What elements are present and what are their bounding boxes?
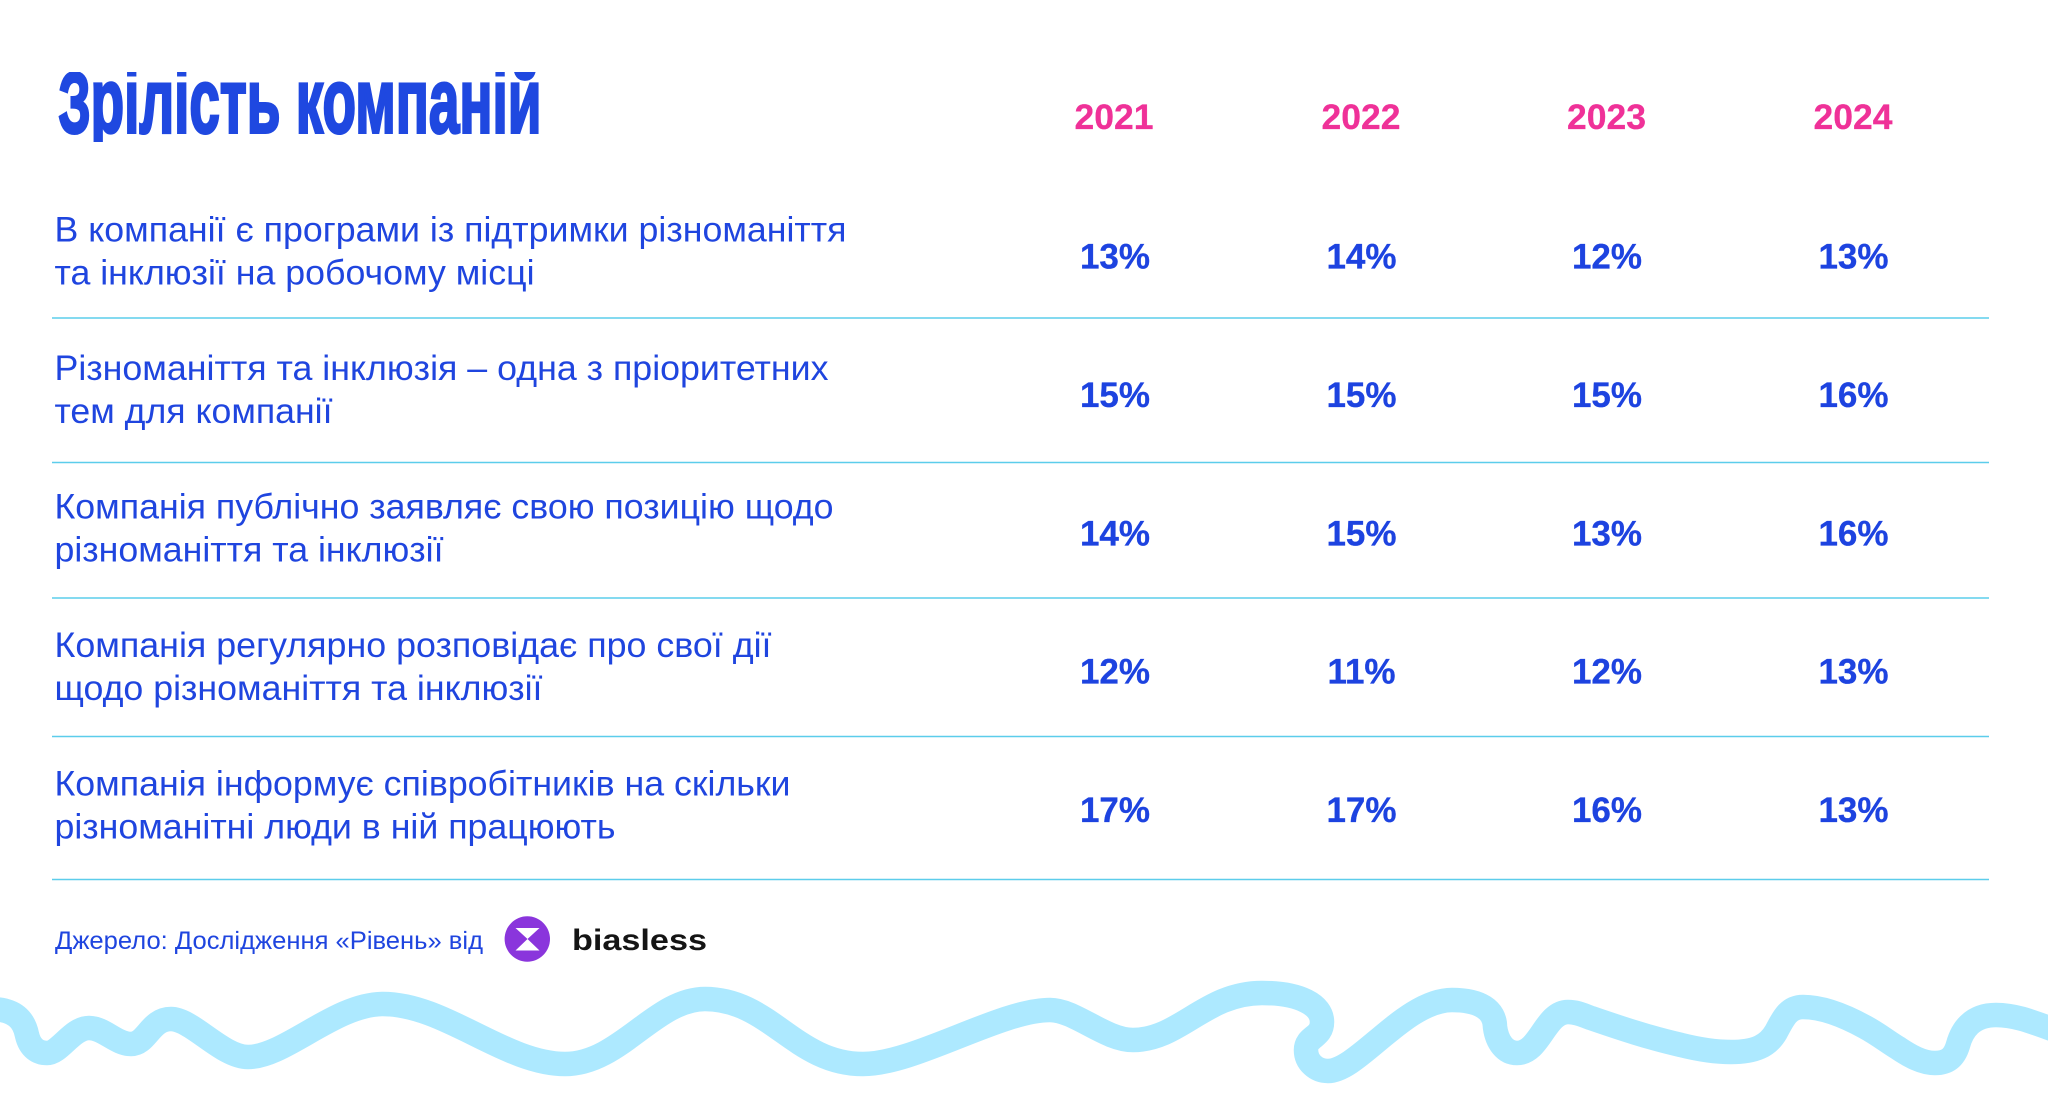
- row 1: 13%: [1080, 238, 1150, 276]
- row 5: Компанія інформує співробітників на скільки: [54, 764, 790, 803]
- row 1: 13%: [1818, 238, 1889, 276]
- row 1: та інклюзії на робочому місці: [54, 254, 534, 293]
- row 4: 12%: [1572, 653, 1642, 692]
- year headers: 2021: [1075, 97, 1153, 137]
- biasless wordmark: biasless: [572, 924, 707, 957]
- row 2: 15%: [1326, 376, 1397, 415]
- row 4: 11%: [1327, 653, 1396, 692]
- table: company maturity: [52, 211, 1989, 879]
- row 4: 13%: [1818, 653, 1889, 692]
- row 3: різноманіття та інклюзії: [54, 530, 444, 570]
- icon: biasless logo mark: [505, 916, 550, 962]
- year headers: 2024: [1814, 97, 1893, 137]
- row 2: тем для компанії: [54, 392, 333, 431]
- row 5: 17%: [1080, 791, 1150, 830]
- row 4: 12%: [1080, 653, 1150, 692]
- row 3: 16%: [1818, 514, 1889, 553]
- row 2: 15%: [1080, 376, 1150, 415]
- row 2: [54, 349, 1889, 431]
- row 5: 16%: [1572, 791, 1642, 830]
- row 3: Компанія публічно заявляє свою позицію щодо: [54, 488, 833, 526]
- row 3: 15%: [1326, 514, 1397, 553]
- row 2: Різноманіття та інклюзія – одна з пріоритетних: [54, 349, 829, 388]
- year headers: [1075, 97, 1893, 137]
- row 1: 14%: [1326, 238, 1397, 276]
- row 4: щодо різноманіття та інклюзії: [54, 669, 543, 708]
- row 5: 13%: [1818, 791, 1889, 830]
- row 2: 15%: [1572, 376, 1642, 415]
- row 4: Компанія регулярно розповідає про свої дії: [54, 626, 772, 665]
- row 3: [54, 488, 1889, 570]
- row 5: 17%: [1326, 791, 1397, 830]
- title: Зрілість компаній: [58, 50, 542, 152]
- year headers: 2023: [1567, 97, 1646, 137]
- row 1: 12%: [1572, 238, 1642, 276]
- row 4: [54, 626, 1889, 708]
- row 1: В компанії є програми із підтримки різноманіття: [54, 211, 846, 250]
- row 3: 13%: [1572, 514, 1642, 553]
- row 5: різноманітні люди в ній працюють: [54, 807, 616, 846]
- row 5: [54, 764, 1889, 846]
- row 3: 14%: [1080, 514, 1150, 553]
- decorative wave: [0, 993, 2048, 1071]
- row 2: 16%: [1818, 376, 1889, 415]
- source note: Джерело: Дослідження «Рівень» від: [55, 927, 483, 955]
- row 1: [54, 211, 1889, 293]
- year headers: 2022: [1322, 97, 1400, 137]
